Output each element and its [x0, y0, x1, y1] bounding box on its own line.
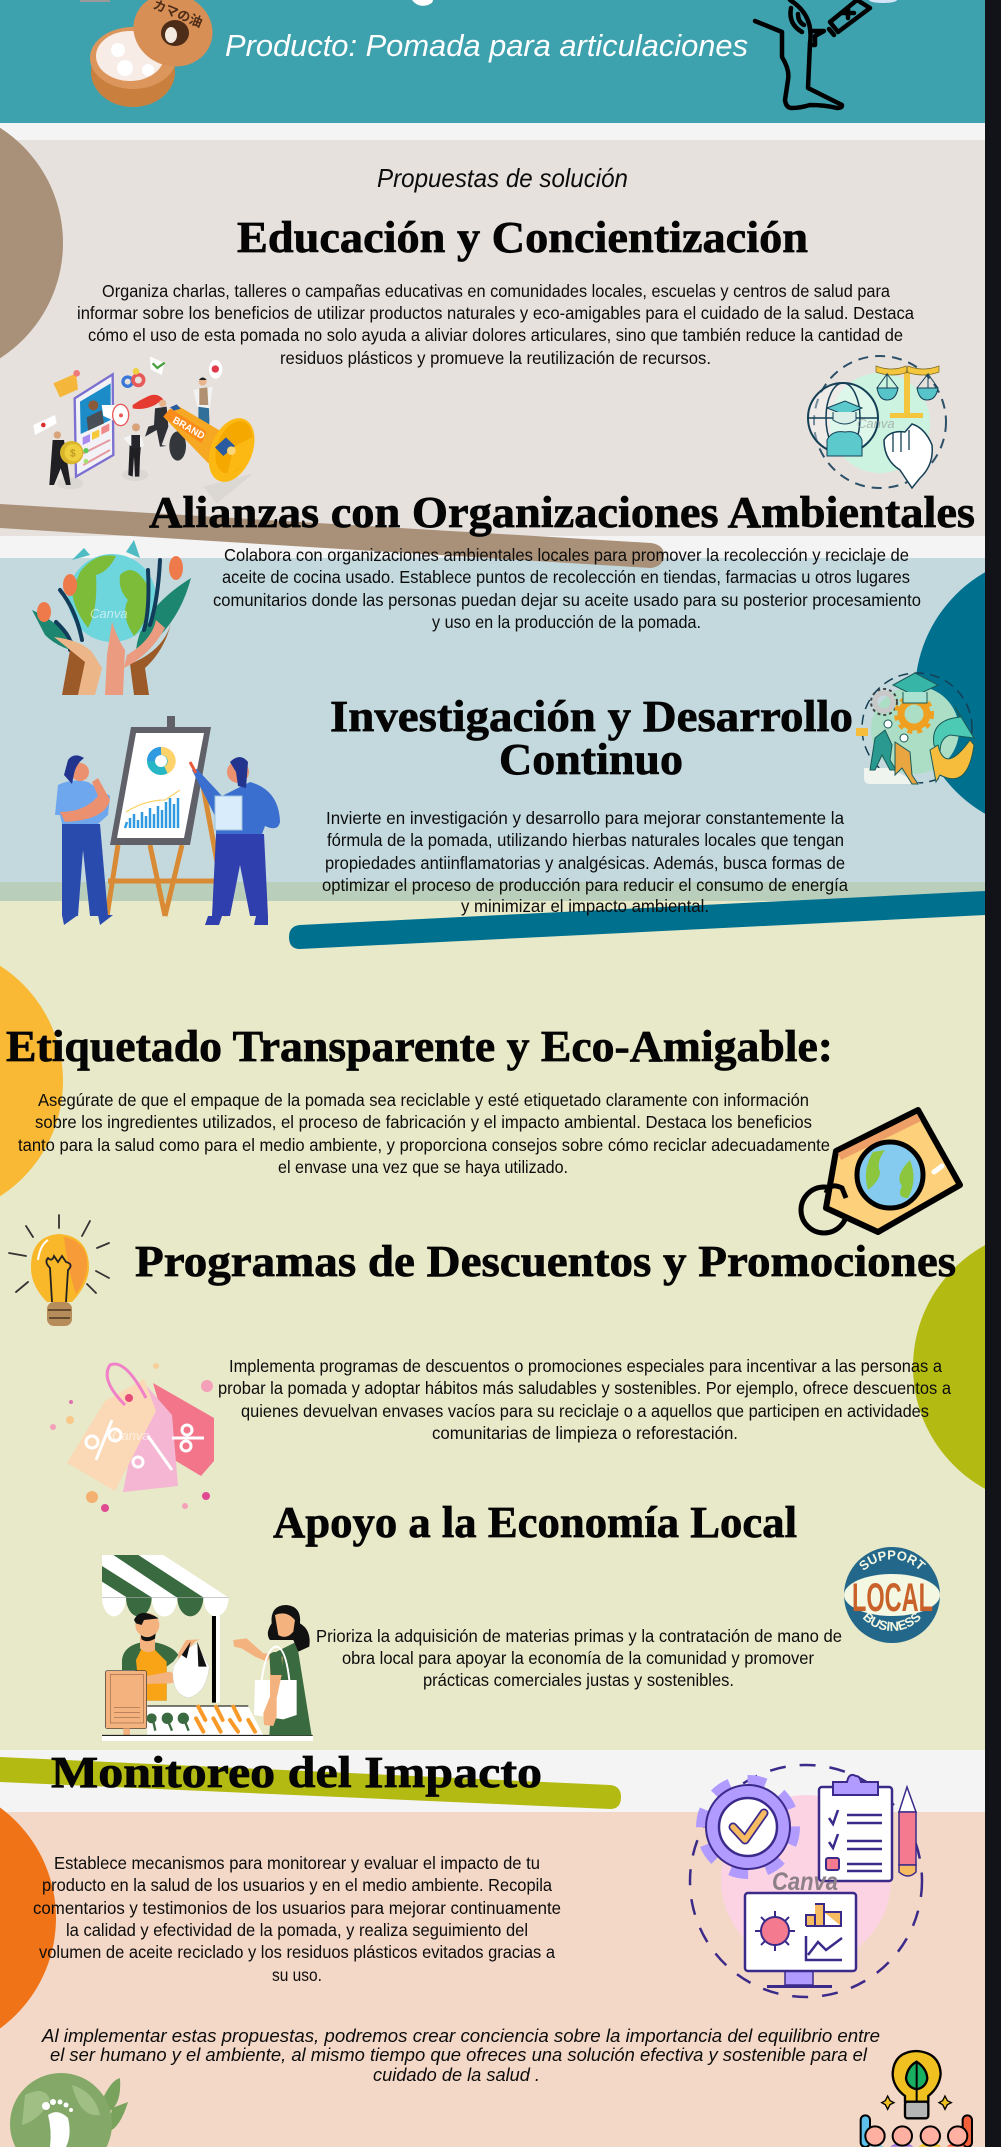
- icon: light bulb: [9, 1215, 109, 1326]
- text: educación: [77, 281, 914, 368]
- partial title remnant: [412, 0, 433, 6]
- text: closing statement: [41, 2026, 880, 2085]
- icon: ointment jar: [80, 0, 223, 107]
- section: educación: [77, 213, 914, 368]
- text: apoyo: [316, 1626, 842, 1690]
- icon: bulb with leaf and people: [861, 2051, 972, 2147]
- text: monitoreo: Establece mecanismos para monitorear y evaluar el impacto de tu: [54, 1853, 540, 1873]
- text: investigación: propiedades antiinflamatorias y analgésicas. Además, busca formas de: [325, 853, 845, 873]
- icon: discount tags: Canva: [112, 1428, 150, 1443]
- text: apoyo: obra local para apoyar la economía de la comunidad y promover: [342, 1648, 814, 1668]
- heading: programas: Programas de Descuentos y Promociones: [135, 1237, 956, 1286]
- icon: earth in hands: Canva: [90, 606, 128, 621]
- heading: etiquetado: Etiquetado Transparente y Eco-Amigable:: [6, 1022, 833, 1071]
- icon: support local business badge: BUSINESS: [862, 1613, 920, 1632]
- icon: research gears and teamwork: [856, 673, 974, 784]
- text: monitoreo: su uso.: [272, 1965, 322, 1985]
- section: investigación: [322, 692, 853, 916]
- icon: eco tag: [801, 1110, 960, 1233]
- text: investigación: fórmula de la pomada, utilizando hierbas naturales locales que tengan: [327, 830, 844, 850]
- text: closing statement: Al implementar estas propuestas, podremos crear conciencia sobre la importancia del equilibrio entre: [41, 2026, 880, 2046]
- heading: investigación: [330, 692, 853, 784]
- text: investigación: optimizar el proceso de producción para reducir el consumo de energía: [322, 875, 848, 895]
- text: etiquetado: tanto para la salud como para el medio ambiente, y proporciona consejos sobre cómo reciclar adecuadamente: [18, 1135, 830, 1155]
- text: educación: residuos plásticos y promueve la reutilización de recursos.: [280, 348, 711, 368]
- text: alianzas: [213, 545, 921, 632]
- section: etiquetado: [6, 1022, 833, 1177]
- text: investigación: y minimizar el impacto ambiental.: [461, 896, 709, 916]
- icon: green footprint globe: [10, 2073, 128, 2147]
- text: etiquetado: sobre los ingredientes utilizados, el proceso de fabricación y el impacto ambiental. Destaca los beneficios: [35, 1112, 812, 1132]
- text: alianzas: aceite de cocina usado. Establece puntos de recolección en tiendas, farmacias u otros lugares: [222, 567, 910, 587]
- subtitle: product: Producto: Pomada para articulaciones: [225, 28, 748, 63]
- text: etiquetado: el envase una vez que se haya utilizado.: [278, 1157, 568, 1177]
- icon: leg with ointment tube: [755, 0, 870, 108]
- text: investigación: Invierte en investigación y desarrollo para mejorar constantemente la: [326, 808, 844, 828]
- text: educación: cómo el uso de esta pomada no solo ayuda a aliviar dolores articulares, sino que también reduce la cantidad de: [88, 325, 903, 345]
- heading: alianzas: Alianzas con Organizaciones Ambientales: [149, 488, 975, 537]
- text: programas: comunitarias de limpieza o reforestación.: [432, 1423, 738, 1443]
- heading: propuestas de solución: Propuestas de solución: [377, 163, 628, 193]
- heading: investigación: Investigación y Desarrollo: [330, 692, 853, 741]
- heading: apoyo: Apoyo a la Economía Local: [273, 1498, 797, 1547]
- text: monitoreo: la calidad y efectividad de la pomada, y realiza seguimiento del: [66, 1920, 528, 1940]
- text: alianzas: comunitarios donde las personas puedan dejar su aceite usado para su posterior procesamiento: [213, 590, 921, 610]
- text: programas: probar la pomada y adoptar hábitos más saludables y sostenibles. Por ejemplo, ofrece descuentos a: [218, 1378, 951, 1398]
- icon: justice and education: Canva: [857, 416, 895, 431]
- text: alianzas: y uso en la producción de la pomada.: [432, 612, 701, 632]
- text: monitoreo: comentarios y testimonios de los usuarios para mejorar continuamente: [33, 1898, 561, 1918]
- heading: monitoreo: Monitoreo del Impacto: [51, 1748, 542, 1797]
- icon: monitoring gear, checklist and screen: [690, 1765, 922, 1997]
- icon: justice and education: [808, 356, 946, 488]
- heading: educación y concientización: Educación y Concientización: [237, 213, 808, 262]
- text: investigación: [322, 808, 848, 916]
- right dark edge: [985, 0, 1001, 2147]
- text: apoyo: Prioriza la adquisición de materias primas y la contratación de mano de: [316, 1626, 842, 1646]
- icon: local market stall: [102, 1555, 313, 1741]
- icon: earth in hands: [32, 540, 191, 695]
- icon: megaphone team: [33, 357, 263, 503]
- icon: support local business badge: SUPPORT: [860, 1550, 926, 1570]
- text: apoyo: prácticas comerciales justas y sostenibles.: [423, 1670, 734, 1690]
- heading: investigación: Continuo: [499, 735, 683, 784]
- icon: discount tags: [50, 1363, 214, 1512]
- text: etiquetado: [18, 1090, 830, 1177]
- text: monitoreo: [33, 1853, 561, 1985]
- bubble remnant: [869, 0, 897, 3]
- text: educación: Organiza charlas, talleres o campañas educativas en comunidades locales, escuelas y centros de salud para: [102, 281, 890, 301]
- text: closing statement: cuidado de la salud .: [373, 2065, 540, 2085]
- text: programas: quienes devuelvan envases vacíos para su reciclaje o a aquellos que participen en actividades: [241, 1401, 929, 1421]
- text: programas: Implementa programas de descuentos o promociones especiales para incentivar a las personas a: [229, 1356, 942, 1376]
- text: programas: [218, 1356, 951, 1443]
- icon: megaphone team: BRAND: [170, 415, 206, 442]
- icon: support local business badge: LOCAL: [852, 1576, 933, 1620]
- text: monitoreo: producto en la salud de los usuarios y en el medio ambiente. Recopila: [42, 1875, 552, 1895]
- icon: support local business badge: [844, 1547, 940, 1643]
- icon: presentation easel with people: [55, 716, 280, 925]
- icon: monitoring gear, checklist and screen: Canva: [772, 1868, 838, 1896]
- text: closing statement: el ser humano y el ambiente, al mismo tiempo que ofreces una solución efectiva y sostenible para el: [50, 2045, 868, 2065]
- icon: megaphone team: $: [70, 449, 76, 460]
- section: monitoreo: [33, 1748, 561, 1985]
- text: alianzas: Colabora con organizaciones ambientales locales para promover la recolección y reciclaje de: [224, 545, 909, 565]
- text: monitoreo: volumen de aceite reciclado y los residuos plásticos evitados gracias a: [39, 1942, 555, 1962]
- text: etiquetado: Asegúrate de que el empaque de la pomada sea reciclable y esté etiquetado claramente con información: [38, 1090, 809, 1110]
- text: educación: informar sobre los beneficios de utilizar productos naturales y eco-amigables para el cuidado de la salud. Destaca: [77, 303, 914, 323]
- section: programas: [135, 1237, 956, 1443]
- section: apoyo local: [273, 1498, 842, 1690]
